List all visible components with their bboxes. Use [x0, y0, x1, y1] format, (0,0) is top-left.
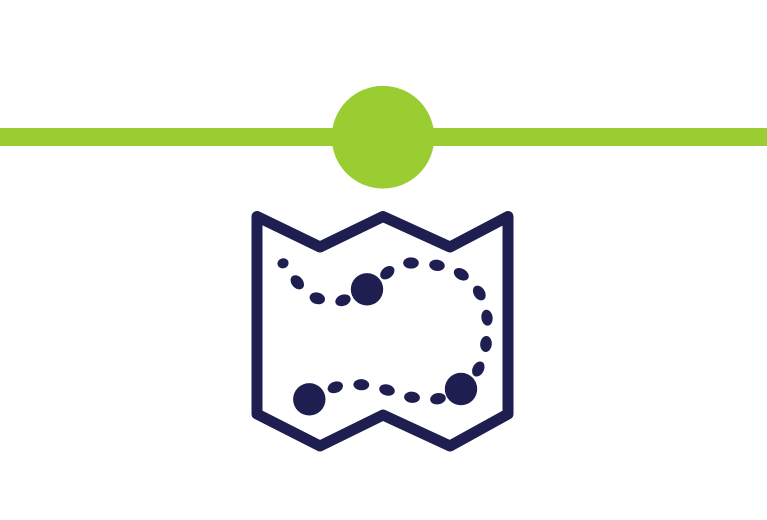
icon: folded map with dotted route: [257, 216, 508, 446]
route waypoints: [293, 273, 477, 415]
green timeline with circular node: [0, 86, 767, 188]
dotted route path: [276, 257, 494, 406]
map outline: [257, 216, 508, 446]
